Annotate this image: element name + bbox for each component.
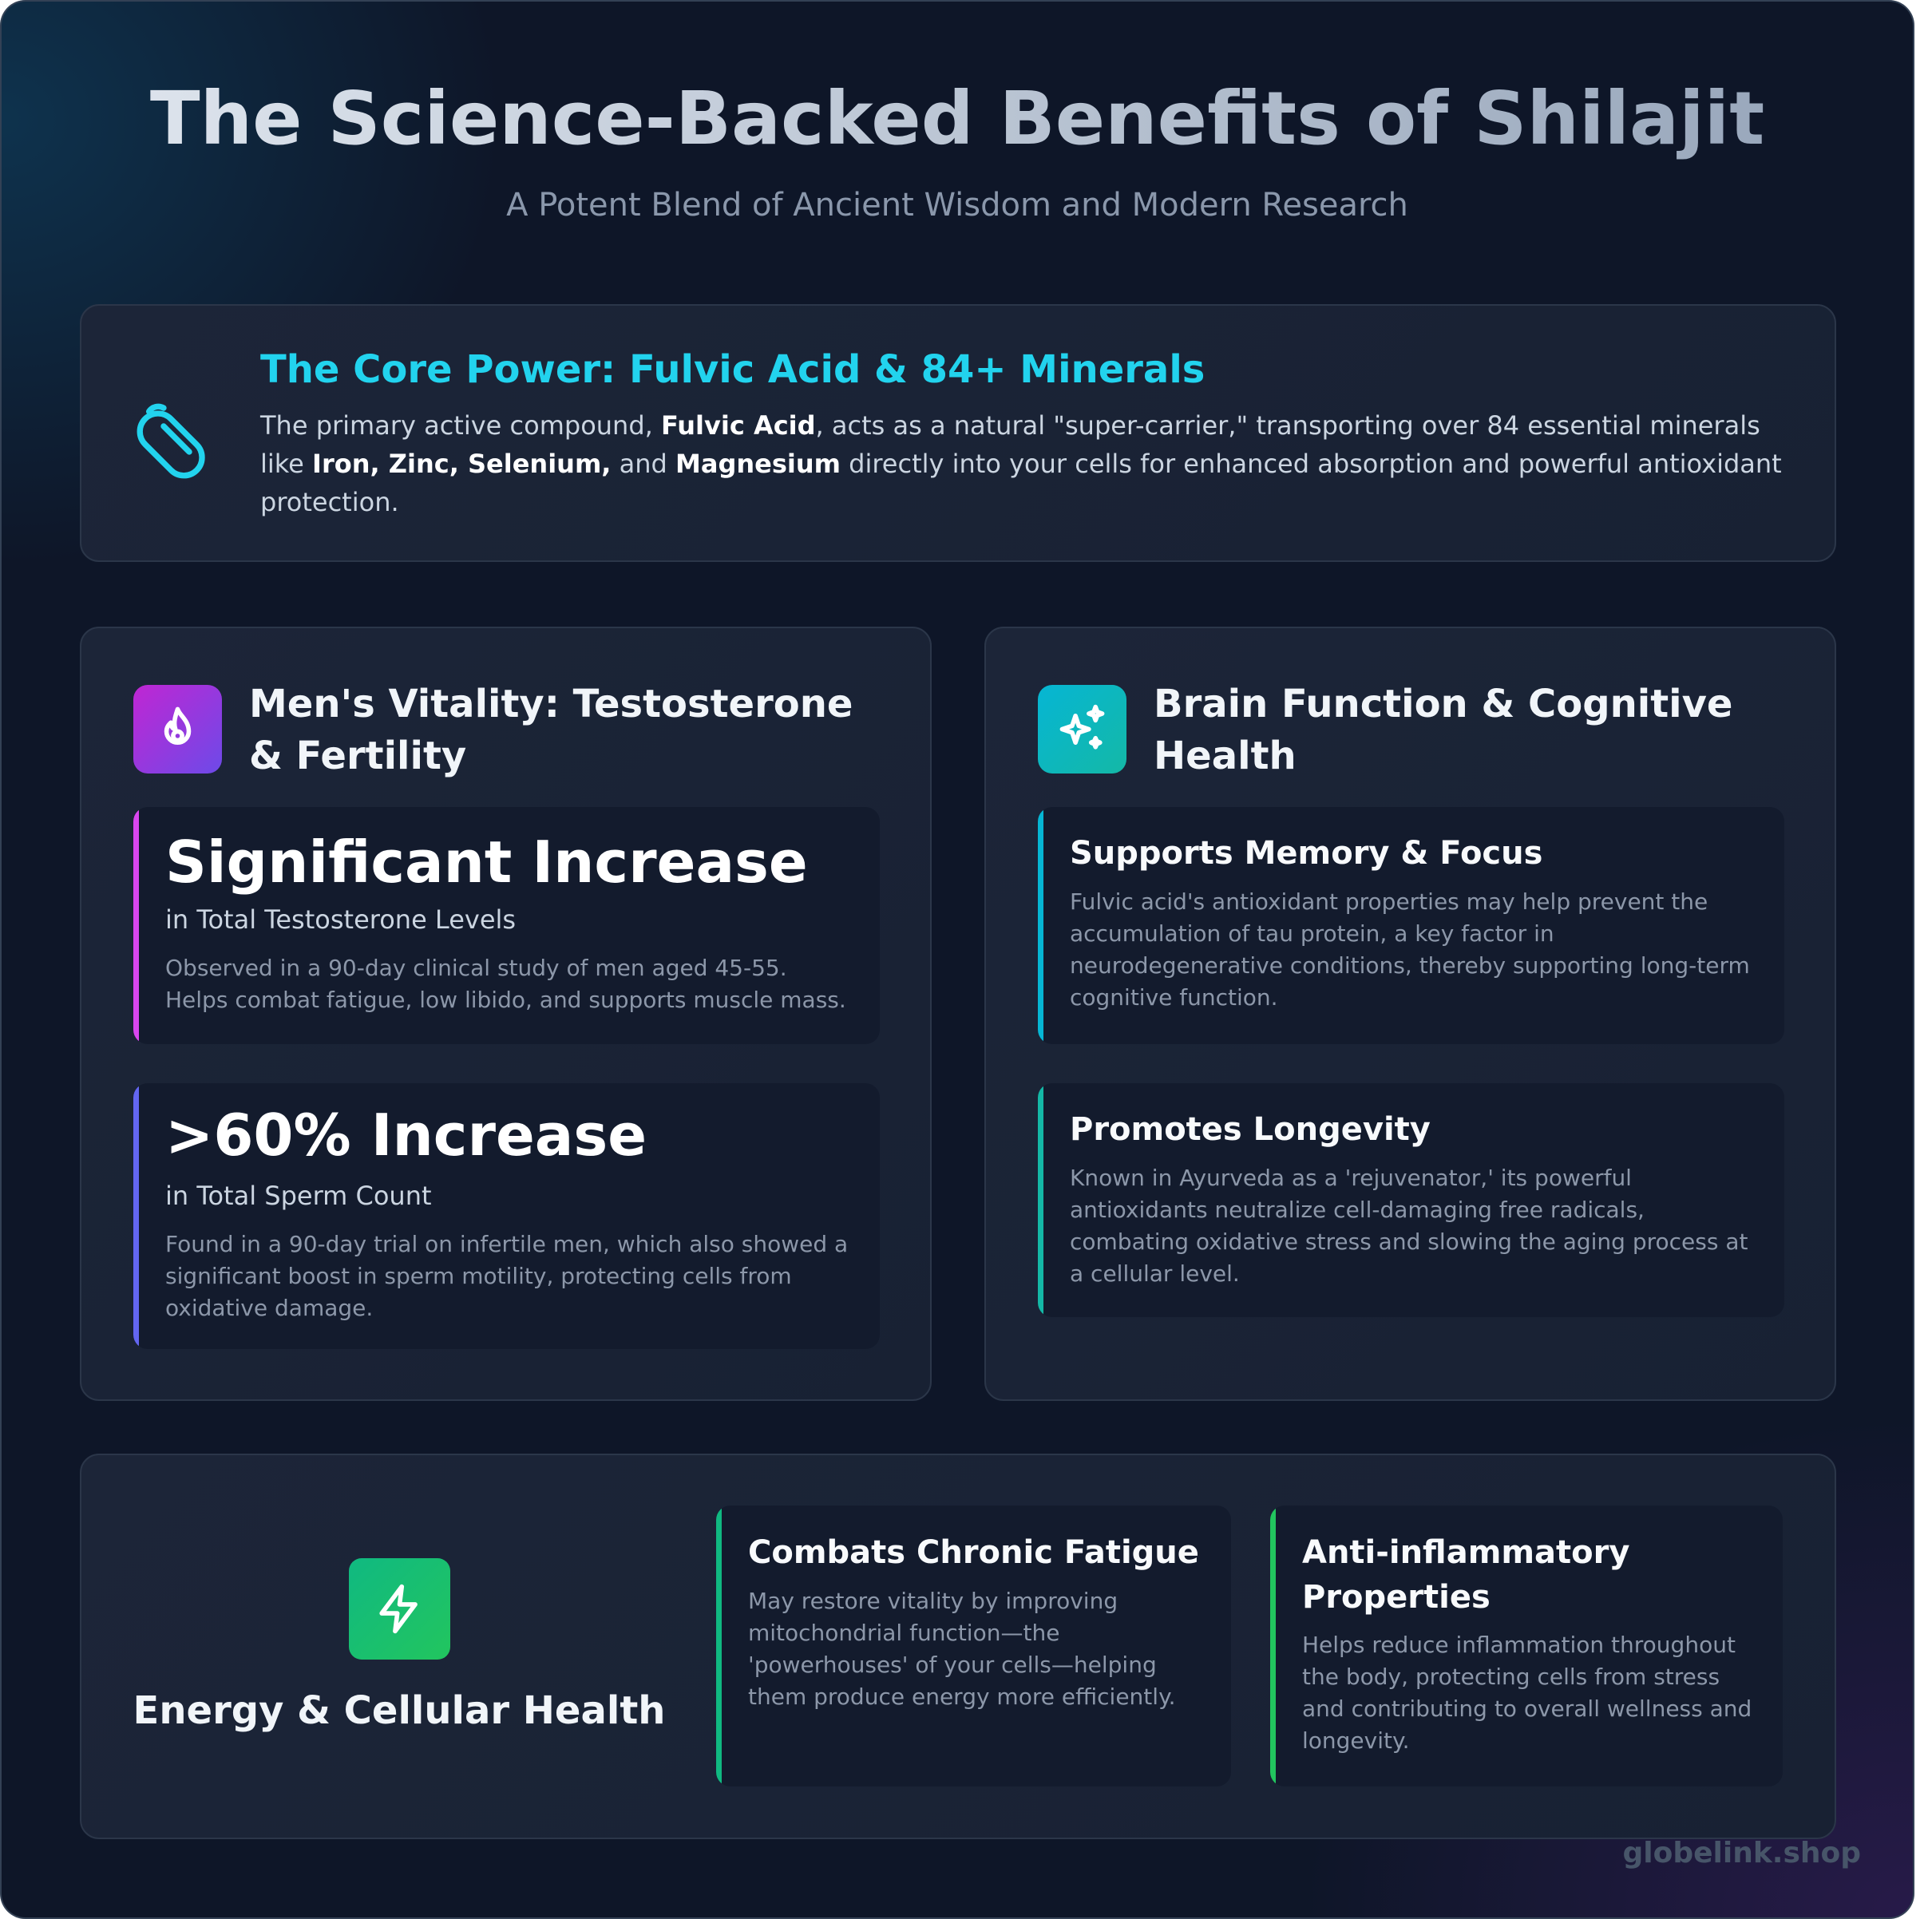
heading: brain [1154, 682, 1732, 778]
stat: sperm count: >60% Increase [165, 1102, 647, 1169]
stat: sperm count [133, 1083, 880, 1349]
heading: brain: Health [1154, 734, 1297, 778]
heading: men's vitality: & Fertility [249, 734, 466, 778]
stat: sperm count: in Total Sperm Count [165, 1181, 432, 1211]
item: memory: Supports Memory & Focus [1070, 835, 1542, 872]
stat: testosterone [133, 807, 880, 1044]
panel: brain function [984, 627, 1836, 1401]
panel: energy [80, 1454, 1836, 1839]
panel: core power [80, 304, 1836, 562]
item: memory [1038, 807, 1784, 1044]
item: memory: Fulvic acid's antioxidant properties may help prevent the accumulation of tau protein, a key factor in neurodegenerative conditions, thereby supporting long-term cognitive function. [1070, 888, 1750, 1011]
item: anti-inflammatory: Anti-inflammatory [1302, 1534, 1629, 1571]
item: longevity: Promotes Longevity [1070, 1111, 1431, 1148]
stat: sperm count: Found in a 90-day trial on infertile men, which also showed a significant boost in sperm motility, protecting cells from oxidative damage. [165, 1231, 848, 1321]
heading: energy: Energy & Cellular Health [133, 1688, 665, 1733]
stat: testosterone: Observed in a 90-day clinical study of men aged 45-55. Helps combat fatigue, low libido, and supports muscle mass. [165, 955, 846, 1013]
heading: men's vitality: Men's Vitality: Testosterone [249, 682, 853, 726]
icon: sparkles [1038, 685, 1126, 774]
title: The Science-Backed Benefits of Shilajit [150, 76, 1764, 161]
icon: flame [133, 685, 222, 774]
item: anti-inflammatory: Properties [1302, 1579, 1491, 1616]
item: fatigue: May restore vitality by improving mitochondrial function—the 'powerhouses' of your cells—helping them produce energy more efficiently. [748, 1588, 1176, 1710]
heading: men's vitality [249, 682, 853, 778]
stat: testosterone: Significant Increase [165, 829, 808, 896]
heading: brain: Brain Function & Cognitive [1154, 682, 1732, 726]
item: anti-inflammatory [1270, 1506, 1783, 1786]
item: fatigue [716, 1506, 1231, 1786]
item: fatigue: Combats Chronic Fatigue [748, 1534, 1199, 1571]
item: longevity: Known in Ayurveda as a 'rejuvenator,' its powerful antioxidants neutralize cell-damaging free radicals, combating oxidative stress and slowing the aging process at a cellular level. [1070, 1165, 1748, 1287]
core heading: The Core Power: Fulvic Acid & 84+ Minerals [260, 347, 1205, 392]
core body text: The primary active compound, Fulvic Acid, acts as a natural "super-carrier," transporting over 84 essential minerals like Iron, Zinc, Selenium, and Magnesium directly into your cells for enhanced absorption and powerful antioxidant protection. [260, 410, 1782, 517]
subtitle: A Potent Blend of Ancient Wisdom and Modern Research [506, 187, 1408, 224]
watermark: globelink.shop [1622, 1837, 1861, 1870]
item: longevity [1038, 1083, 1784, 1317]
item: anti-inflammatory: Helps reduce inflammation throughout the body, protecting cells from stress and contributing to overall wellness and longevity. [1302, 1632, 1752, 1754]
stat: testosterone: in Total Testosterone Levels [165, 904, 516, 935]
panel: men's vitality [80, 627, 932, 1401]
icon: pill [137, 404, 205, 479]
icon: lightning [349, 1558, 450, 1660]
